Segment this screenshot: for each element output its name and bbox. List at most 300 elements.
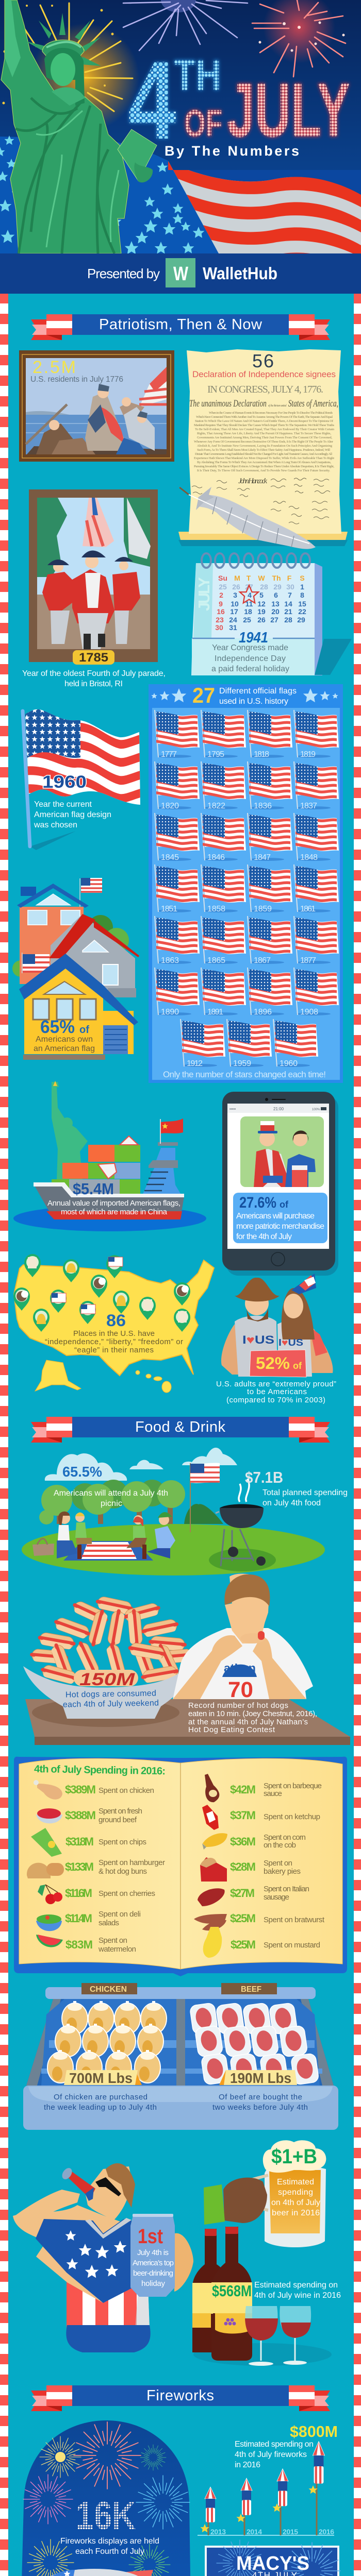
calendar days: 17 (230, 607, 238, 616)
soldiers (42, 550, 140, 649)
calendar days: 13 (271, 600, 280, 608)
flag years: 1858 (207, 905, 225, 913)
calendar rings (202, 553, 310, 568)
icon: WalletHub logo (166, 258, 195, 287)
declaration text: When in the Course of Human Events It Becomes Necessary For One People To Dissolve The Political Bonds (209, 411, 333, 415)
case base (23, 2086, 338, 2130)
panel: 27 official flags: Only the number of stars changed each time! (163, 1070, 326, 1079)
food icons (27, 1774, 227, 1958)
title: 4th of July: 4 (128, 38, 176, 162)
declaration text: Mankind Requires That They Should Declare The Causes Which Impel Them To The Separation. We Hold These Truths (194, 423, 334, 427)
calendar days: 10 (231, 600, 239, 608)
right page rows: $25M (231, 1938, 256, 1951)
right page rows: $42M (230, 1783, 256, 1796)
ship bridge (142, 1142, 182, 1196)
book: spending in 2016: Spent on hamburger (99, 1858, 165, 1867)
calendar days: 22 (298, 607, 306, 616)
calendar days: 12 (257, 600, 266, 608)
rocket chart: $800M: 2014 (247, 2528, 262, 2536)
calendar days: 16 (217, 607, 225, 616)
cargo ship (13, 1081, 206, 1231)
panel: 27 official flags: 27 (192, 683, 215, 707)
left page rows: $318M (65, 1835, 94, 1848)
stat: 2.5M (32, 358, 76, 377)
calendar days: 26 (232, 583, 240, 591)
containers (52, 1136, 140, 1196)
book: spending in 2016: Spent on (264, 1859, 292, 1868)
book: spending in 2016: on the cob (264, 1841, 296, 1850)
phone: 27.6% patriotic merchandise (222, 1092, 338, 1276)
deli case (23, 1983, 338, 2130)
alaska (35, 1360, 81, 1391)
beer mug: $1+B: spending (278, 2188, 313, 2197)
caption: record hot dogs: at the annual 4th of July Nathan’s (188, 1718, 308, 1726)
waving flag stripes (168, 161, 361, 253)
case base: Of chicken are purchased (54, 2093, 147, 2102)
right page rows: $28M (230, 1860, 256, 1873)
US map: 86 places: “independence,” “liberty,” “freedom” or (45, 1337, 183, 1346)
shirt logo: athan (224, 1662, 256, 1674)
book: spending in 2016: Spent on fresh (99, 1807, 142, 1816)
calendar days: 31 (229, 623, 237, 632)
US map: 86 places: 86 (106, 1311, 126, 1330)
caption: oldest parade: Year of the oldest Fourth of July parade, (22, 669, 166, 678)
beef trays (189, 2003, 319, 2085)
declaration parchment (178, 349, 348, 549)
calendar days: 18 (244, 607, 252, 616)
calendar days: 29 (273, 583, 282, 591)
declaration text: Governments Are Instituted Among Men, Deriving Their Just Powers From The Consent Of The Governed, (197, 436, 332, 439)
picnic scene: on July 4th food (262, 1499, 321, 1507)
caption: proud: (compared to 70% in 2003) (226, 1396, 325, 1404)
small flag (23, 954, 50, 973)
sign: 52% (256, 1354, 290, 1372)
flag years: 1847 (254, 853, 271, 862)
subtitle: By The Numbers (165, 143, 299, 159)
phone: 27.6% patriotic merchandise: ••••• (229, 1108, 236, 1111)
declaration parchment: Declaration of Independence signees (192, 369, 336, 379)
left page rows: $114M (65, 1912, 92, 1925)
rocket chart: $800M: Estimated spending on (235, 2440, 314, 2449)
flag years: 1848 (300, 853, 318, 862)
dome: 16K fireworks (19, 2420, 194, 2576)
flag years: 1959 (233, 1059, 251, 1068)
wine glasses (245, 2306, 311, 2366)
flag years: 1837 (300, 802, 317, 810)
bursts (23, 2422, 194, 2576)
small flag (81, 878, 102, 893)
beer mug: $1+B (204, 2140, 326, 2247)
stat (34, 1017, 95, 1053)
heading: Food & Drink (31, 1417, 330, 1443)
left page rows: $133M (65, 1860, 94, 1873)
flag years: 1890 (161, 1008, 179, 1016)
calendar days: T (247, 574, 251, 582)
phone: 27.6% patriotic merchandise: 21:00 (273, 1107, 284, 1111)
caption: record hot dogs: Hot Dog Eating Contest (188, 1725, 275, 1734)
caption: record hot dogs: Record number of hot dogs (188, 1701, 288, 1710)
flag years: 1861 (300, 905, 316, 913)
declaration text: Whenever Any Form Of Government Becomes Destructive Of These Ends, It Is The Right Of The People To Alter (194, 440, 334, 444)
beer mug: $1+B: beer in 2016 (272, 2209, 320, 2217)
sign: of (293, 1361, 302, 1371)
signatures (192, 477, 330, 524)
book: spending in 2016: bakery pies (264, 1867, 301, 1876)
flag years: 1819 (300, 750, 316, 759)
US map: 86 places: Places in the U.S. have (73, 1329, 155, 1338)
calendar days: Su (218, 574, 227, 582)
dome: 16K fireworks: each Fourth of July (75, 2547, 144, 2556)
book: spending in 2016: ground beef (99, 1816, 137, 1824)
man drinking beer (13, 2163, 193, 2352)
case base: two weeks before July 4th (212, 2103, 308, 2112)
caption: current flag (34, 800, 111, 829)
book: spending in 2016 (14, 1757, 347, 1976)
flag years: 1859 (254, 905, 272, 913)
panel: 27 official flags: used in U.S. history (219, 697, 288, 706)
book: spending in 2016: Spent on chicken (99, 1786, 154, 1795)
calendar days: Th (272, 574, 281, 582)
statue of liberty (1, 0, 157, 253)
phone: 27.6% patriotic merchandise: 100% (312, 1108, 320, 1111)
declaration parchment: The unanimous Declaration of the thirteen united States of America, (189, 398, 338, 409)
beef sign: BEEF (241, 1985, 261, 1994)
left page rows: $116M (65, 1887, 92, 1900)
caption: record hot dogs (188, 1701, 317, 1734)
calendar 1941: a paid federal holiday (211, 665, 289, 673)
rocket chart: $800M: 2015 (283, 2528, 298, 2536)
flag years: 1836 (254, 802, 272, 810)
flag years: 1877 (300, 956, 316, 965)
heading: Patriotism, Then & Now: Patriotism, Then & Now (99, 316, 262, 333)
left page rows: $83M (65, 1938, 93, 1951)
chinese flag (160, 1118, 183, 1144)
calendar 1941: JULY (195, 577, 213, 611)
flag years: 1818 (254, 750, 269, 759)
stat (30, 358, 123, 384)
caption: current flag: American flag design (34, 810, 111, 819)
book: spending in 2016: Spent on barbeque (264, 1782, 322, 1790)
book: spending in 2016: Spent on corn (264, 1833, 306, 1842)
stat: Americans own (36, 1035, 93, 1044)
declaration parchment: IN CONGRESS, JULY 4, 1776. (207, 384, 323, 395)
title: 4th of July: TH (174, 51, 221, 100)
hot dog bowl: 150M: 150M (79, 1670, 135, 1689)
beef sign (221, 1983, 277, 1994)
picnic family (32, 1512, 175, 1561)
book: spending in 2016: Spent on deli (99, 1910, 141, 1919)
picnic scene: $7.1B (245, 1468, 283, 1486)
calendar days: 27 (245, 583, 253, 591)
rocket chart: $800M: $800M (290, 2422, 338, 2441)
book: spending in 2016: Spent on (99, 1936, 127, 1945)
beer can stat: 1st (138, 2225, 163, 2248)
calendar days: M (234, 574, 240, 582)
hand with sleeve (204, 2178, 267, 2225)
flag years: 1896 (254, 1008, 272, 1016)
right page rows: $36M (230, 1835, 256, 1848)
book: spending in 2016: sausage (264, 1893, 289, 1902)
chicken sign: CHICKEN (90, 1985, 127, 1994)
framed painting: 2.5M residents (19, 350, 174, 462)
stat: 65% (40, 1017, 75, 1037)
picnic scene (22, 1448, 348, 1575)
flag years: 1891 (207, 1008, 223, 1016)
big 1960 flag (21, 706, 144, 850)
blue star field (0, 135, 219, 254)
title: 4th of July (128, 38, 350, 162)
flag years: 1820 (161, 802, 179, 810)
picnic flag (190, 1463, 220, 1532)
stat: of (79, 1024, 89, 1036)
rockets (200, 2442, 325, 2535)
caption: oldest parade (22, 669, 166, 688)
dome: 16K fireworks: 16K (76, 2494, 136, 2538)
message bubble: of (280, 1199, 289, 1210)
heading: Fireworks (31, 2385, 330, 2411)
book: spending in 2016: & hot dog buns (99, 1867, 147, 1876)
caption: current flag: Year the current (34, 800, 92, 809)
message bubble: 27.6% (239, 1194, 276, 1211)
flag years: 1865 (207, 956, 225, 965)
chickens (47, 2001, 167, 2083)
caption: proud: U.S. adults are “extremely proud” (216, 1380, 336, 1388)
US map: 86 places (13, 1254, 214, 1393)
picnic scene: 65.5% (62, 1464, 102, 1480)
fireworks: red burst (252, 0, 346, 77)
flag years: 1960 (280, 1059, 298, 1068)
title: 4th of July: TH (174, 51, 221, 100)
title: 4th of July: 4 (128, 38, 176, 162)
calendar days: 30 (215, 623, 223, 632)
beer mug: $1+B: $1+B (271, 2145, 317, 2168)
plaque: 1785: 1785 (79, 651, 108, 665)
icon: quill (179, 487, 316, 549)
caption: record hot dogs: eaten in 10 min. (Joey Chestnut, 2016), (188, 1709, 317, 1718)
book: spending in 2016: Spent on chips (99, 1838, 146, 1846)
beer can stat (130, 2214, 175, 2297)
ship hull (34, 1182, 184, 1219)
rocket chart: $800M: in 2016 (235, 2461, 260, 2469)
cargo ship: $5.4M (73, 1180, 114, 1198)
declaration text: It Is Their Duty, To Throw Off Such Government, And To Provide New Guards For Their Future Security. (197, 469, 330, 472)
declaration text: To Be Self-Evident, That All Men Are Created Equal, That They Are Endowed By Their Creator With Certain (195, 428, 335, 431)
declaration text: Experience Hath Shewn That Mankind Are More Disposed To Suffer, While Evils Are Sufferable Than To Right (194, 456, 334, 460)
flag years: 1777 (161, 750, 177, 759)
stat: U.S. residents in July 1776 (30, 375, 123, 384)
rocket chart: $800M: 2013 (210, 2528, 226, 2536)
calendar days: 2 (219, 591, 223, 599)
icon: WalletHub logo: W (173, 263, 188, 285)
flag years (161, 750, 318, 1068)
heading: Fireworks: Fireworks (146, 2387, 214, 2404)
calendar days: 14 (284, 600, 292, 608)
dome: 16K fireworks: Fireworks displays are held (60, 2537, 159, 2546)
calendar days: 28 (260, 583, 268, 591)
map pins (13, 1254, 190, 1332)
couple picture (240, 1116, 324, 1187)
macy's poster: MACY'S (236, 2553, 309, 2574)
rocket chart: $800M: 4th of July fireworks (235, 2450, 307, 2459)
hot dog bowl: 150M: each 4th of July weekend (63, 1699, 159, 1709)
table (25, 1698, 350, 1745)
wine bottles: $568M (192, 2227, 341, 2366)
flag years: 1908 (300, 1008, 318, 1016)
declaration text: By Abolishing The Forms To Which They Are Accustomed. But When A Long Train Of Abuses And Usurpations, (197, 461, 331, 464)
heading: Food & Drink: Food & Drink (135, 1419, 226, 1435)
book: spending in 2016: watermelon (98, 1945, 136, 1954)
calendar days: 27 (270, 616, 278, 624)
declaration text: Pursuing Invariably The Same Object Evinces A Design To Reduce Them Under Absolute Despotism, It Is Their Right, (194, 465, 334, 468)
picnic scene: Total planned spending (262, 1488, 348, 1497)
tag: 190M Lbs: 190M Lbs (230, 2070, 291, 2086)
book: spending in 2016: salads (99, 1919, 119, 1927)
picnic scene: Americans will attend a July 4th (54, 1489, 168, 1498)
calendar days: 30 (286, 583, 294, 591)
wine bottles: $568M: 4th of July wine in 2016 (254, 2291, 341, 2300)
calendar days: 9 (219, 600, 223, 608)
grill (216, 1479, 266, 1566)
declaration text: Such Form, As To Them Shall Seem Most Likely To Effect Their Safety And Happiness. Prudence, Indeed, Will (197, 448, 330, 452)
flag years: 1867 (254, 956, 271, 965)
message bubble (233, 1193, 327, 1243)
calendar 1941: 1941 (239, 630, 268, 646)
flag years: 1795 (207, 750, 224, 759)
book: spending in 2016: Spent on Italian (264, 1885, 309, 1893)
halo behind statue (2, 3, 139, 131)
beer can stat: holiday (141, 2279, 165, 2288)
small statue (52, 1082, 88, 1180)
message bubble: for the 4th of July (236, 1232, 292, 1241)
beer can stat: America’s top (133, 2259, 174, 2267)
picnic scene: picnic (101, 1499, 122, 1508)
shirts text (242, 1333, 303, 1348)
calendar 1941 (191, 553, 352, 675)
calendar days: W (258, 574, 265, 582)
right page rows: $37M (230, 1809, 256, 1822)
chicken sign (81, 1983, 137, 1994)
case base: Of beef are bought the (219, 2093, 302, 2102)
US map: 86 places: “eagle” in their names (74, 1346, 154, 1354)
heading: Patriotism, Then & Now (31, 314, 330, 340)
calendar days: 5 (259, 591, 264, 599)
title: 4th of July: OF (184, 102, 222, 145)
declaration text: Station To Which The Laws Of Nature And Of Nature's God Entitle Them, A Decent Respect To The Opinions Of (195, 419, 334, 423)
calendar days: 11 (245, 600, 253, 608)
calendar days: 28 (284, 616, 292, 624)
calendar days: 3 (233, 591, 237, 599)
message bubble: Americans will purchase (236, 1212, 315, 1221)
caption: proud (216, 1380, 336, 1404)
flag grid (155, 710, 339, 1067)
cargo ship: Annual value of imported American flags, (47, 1199, 180, 1208)
left page rows: $388M (65, 1809, 96, 1822)
caption: proud: to be Americans (247, 1387, 307, 1396)
flag years: 1851 (161, 905, 177, 913)
book: spending in 2016: sauce (264, 1789, 282, 1798)
calendar days: 26 (257, 616, 266, 624)
hero header (0, 0, 361, 253)
declaration text: Dictate That Governments Long Established Should Not Be Changed For Light And Transient Causes; And Accordingly All (195, 452, 332, 456)
rocket chart: $800M (198, 2422, 338, 2536)
shirts text: I♥US (278, 1337, 303, 1348)
calendar days: 25 (219, 583, 227, 591)
framed painting: 1785 parade (29, 489, 158, 665)
right page rows: $25M (230, 1912, 256, 1925)
caption: oldest parade: held in Bristol, RI (64, 680, 123, 688)
wine bottles: $568M: Estimated spending on (254, 2281, 338, 2290)
calendar days: 23 (216, 616, 224, 624)
calendar days: 24 (229, 616, 237, 624)
beer mug: $1+B: on 4th of July (271, 2198, 320, 2207)
hot dog bowl: 150M (23, 1596, 199, 1719)
couple: 52% extremely proud (221, 1274, 333, 1377)
calendar days: 6 (274, 591, 278, 599)
clouds (45, 1448, 237, 1481)
calendar days: 4 (248, 591, 252, 599)
calendar days: 20 (271, 607, 280, 616)
beer can stat: July 4th is (137, 2248, 169, 2257)
calendar days: 1 (300, 583, 304, 591)
calendar days: S (300, 574, 305, 582)
beer mug: $1+B: Estimated (277, 2178, 314, 2187)
tag: 700M Lbs: 700M Lbs (69, 2070, 133, 2086)
declaration text: Which Have Connected Them With Another And To Assume Among The Powers Of The Earth, The Separate And Equal (196, 415, 333, 419)
hawaii (136, 1370, 171, 1393)
header stars (151, 688, 338, 702)
declaration parchment: 56 (252, 350, 274, 371)
calendar 1941: Year Congress made (212, 643, 288, 652)
panel: 27 official flags: Different official flags (219, 687, 297, 696)
hot dog eater: 70 (173, 1573, 313, 1702)
stat: an American flag (34, 1044, 95, 1053)
declaration text: Abolish It, And To Institute New Government, Laying Its Foundation On Such Principles And Organizing (197, 444, 333, 448)
fireworks: purple burst (123, 0, 248, 50)
title: 4th of July: OF (184, 102, 222, 145)
flag years: 1845 (161, 853, 179, 862)
flag years: 1863 (161, 956, 179, 965)
calendar days: 21 (284, 607, 292, 616)
houses: 65% own a flag (12, 878, 139, 1060)
caption: current flag: was chosen (34, 821, 77, 829)
plaque: 1785 (73, 650, 114, 665)
calendar days: 8 (300, 591, 304, 599)
calendar days: 19 (257, 607, 266, 616)
calendar days (215, 574, 306, 632)
presented by band: WalletHub (203, 264, 277, 283)
message bubble: more patriotic merchandise (236, 1222, 324, 1231)
can (60, 2166, 95, 2201)
shirts text: I♥US (242, 1333, 274, 1346)
calendar days: 7 (288, 591, 292, 599)
book: spending in 2016: Spent on ketchup (264, 1812, 320, 1821)
declaration text (194, 411, 335, 472)
signatures: John Hancock (238, 477, 267, 485)
sign (250, 1350, 306, 1377)
foam (263, 2140, 326, 2173)
trees (39, 1480, 223, 1524)
hot dog eater: 70: 70 (228, 1677, 253, 1702)
left page rows (65, 1783, 96, 1951)
calendar days: 15 (298, 600, 306, 608)
left page rows: $389M (65, 1783, 96, 1796)
beer can stat: beer-drinking (133, 2269, 173, 2278)
panel: 27 official flags (149, 683, 343, 1083)
presented by band (0, 253, 361, 294)
book: spending in 2016: Spent on bratwurst (264, 1916, 325, 1924)
macy's poster (201, 2540, 340, 2576)
calendar days: 25 (243, 616, 251, 624)
